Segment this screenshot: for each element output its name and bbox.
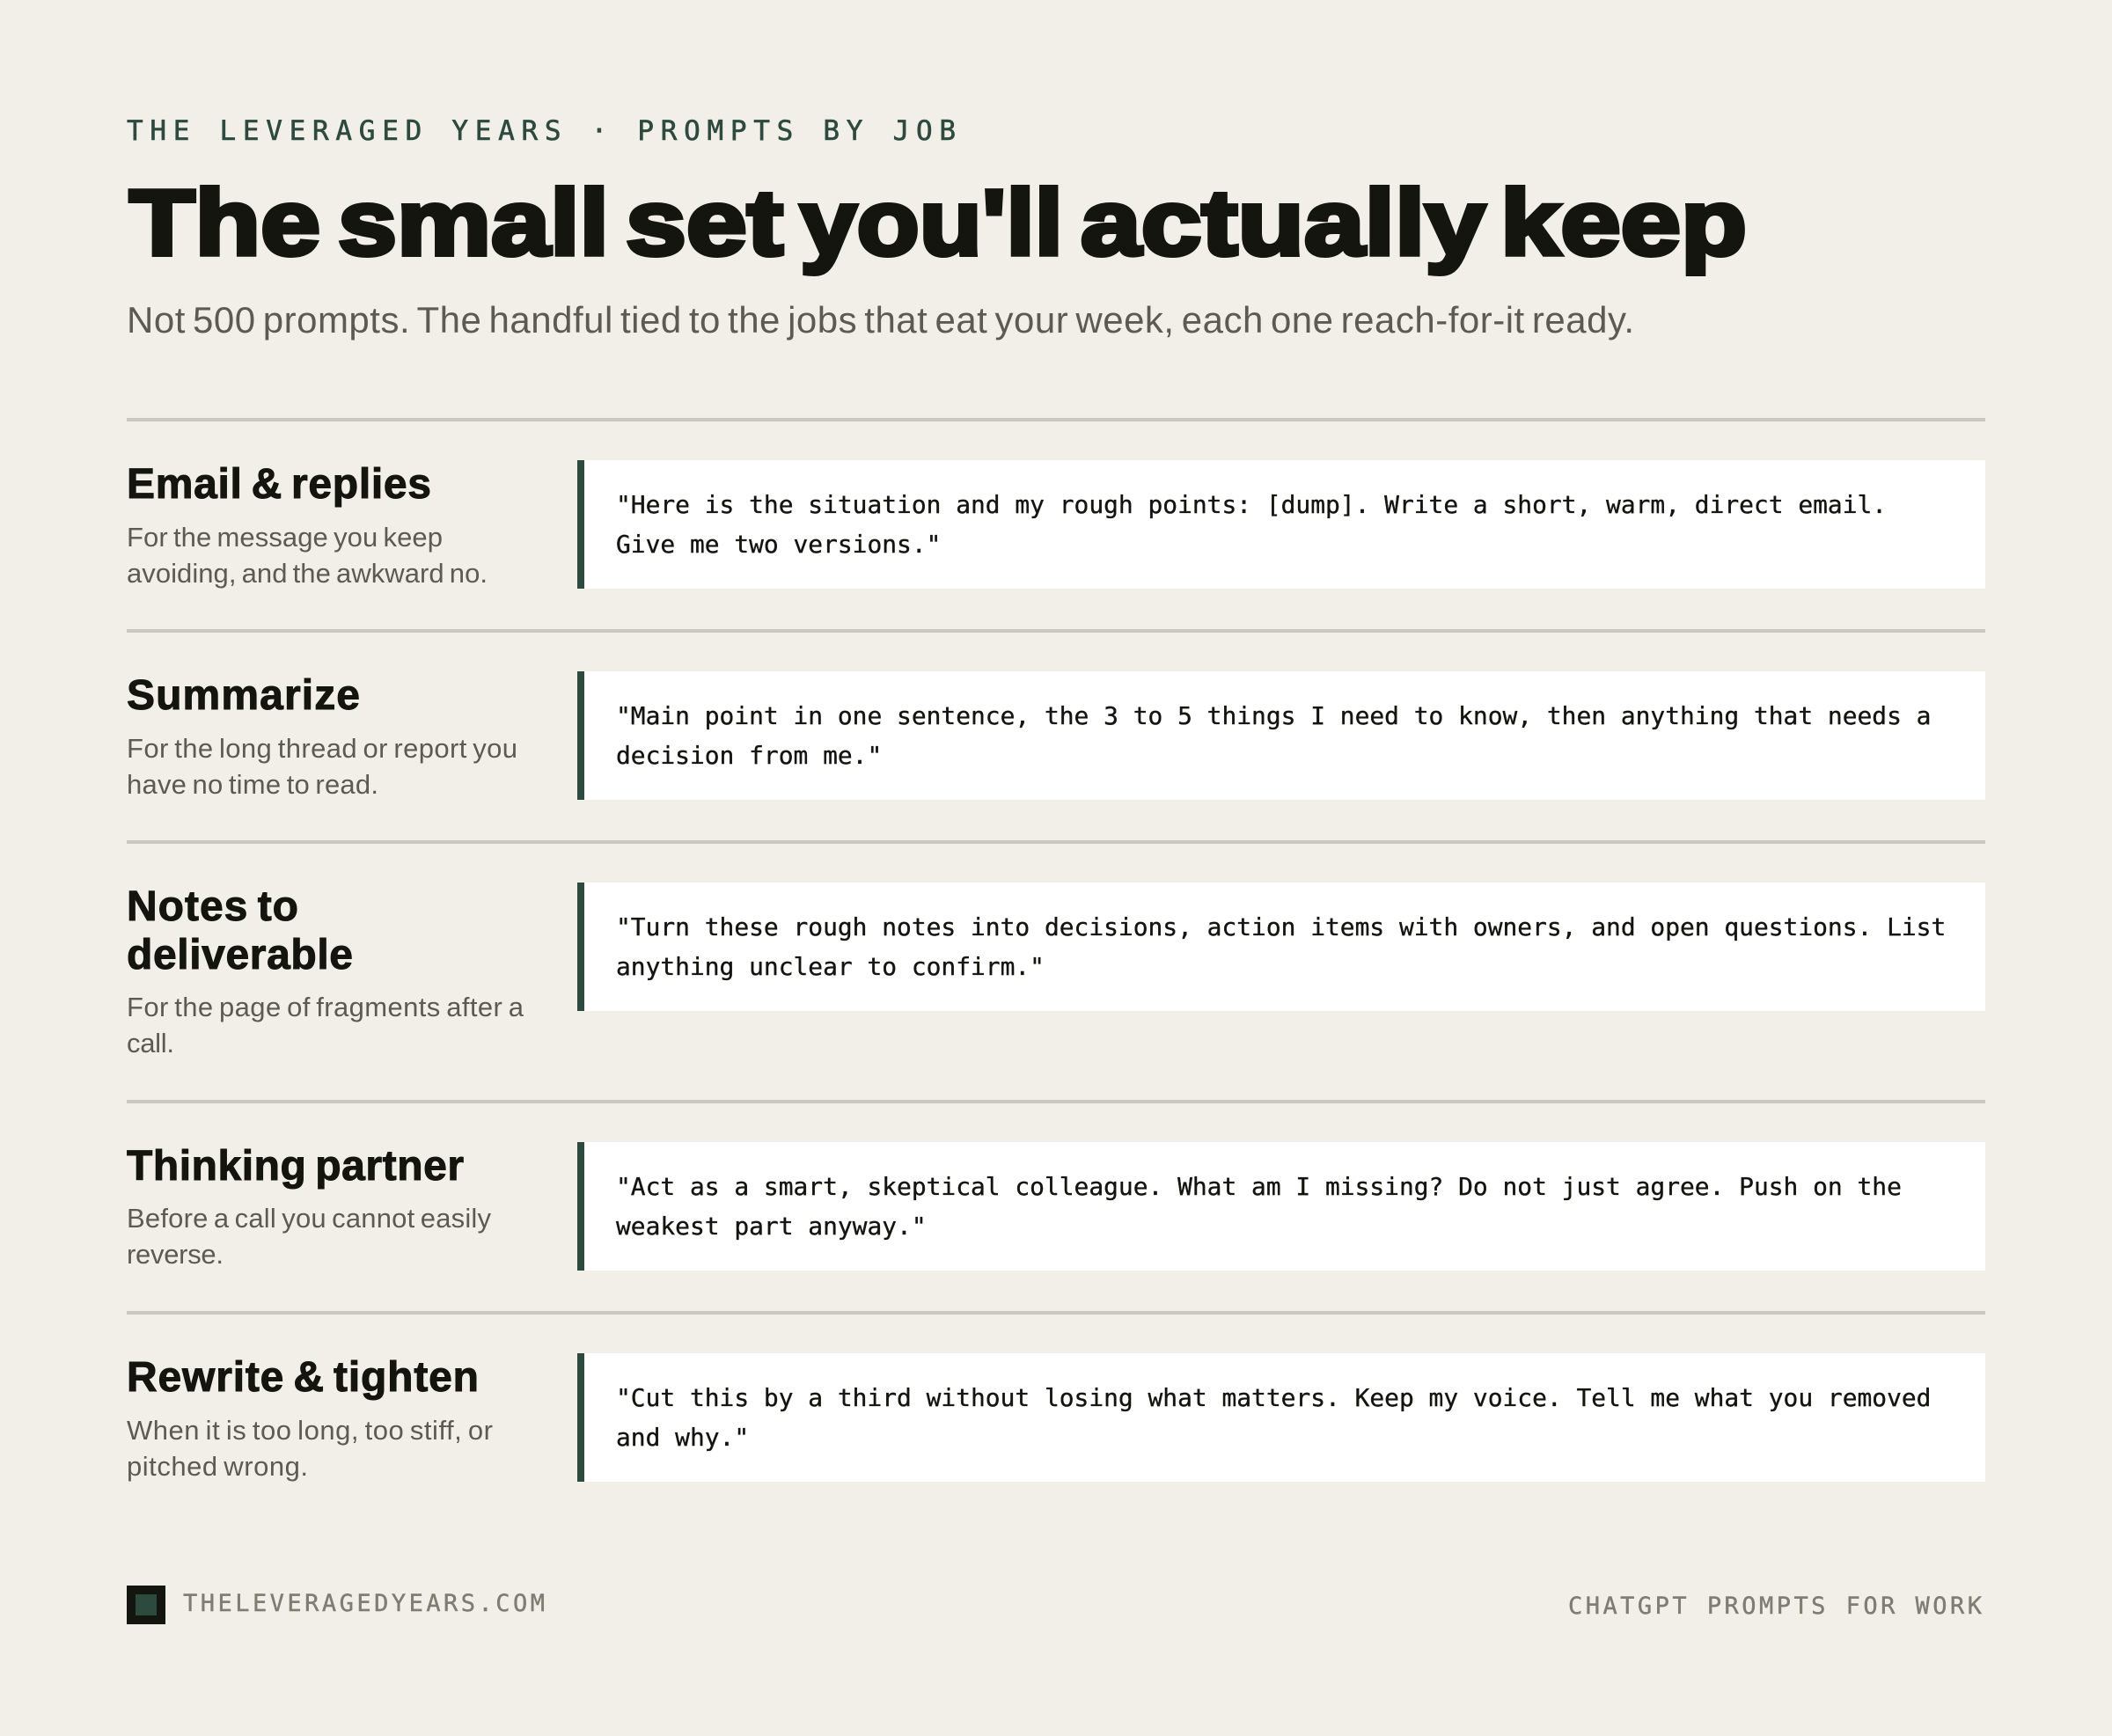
prompt card: Summarize: decision from me." [616, 741, 882, 770]
prompt card: Notes to deliverable: "Turn these rough notes into decisions, action items with owners, and open questions. List [616, 912, 1946, 941]
heading: Email & replies: Email & replies [127, 461, 431, 508]
title: you'll [800, 171, 1063, 275]
prompt card: Email & replies: "Here is the situation and my rough points: [dump]. Write a short, warm, direct email. [616, 490, 1887, 519]
row rule 2 [127, 629, 1985, 633]
description: Rewrite & tighten [127, 1415, 493, 1482]
prompt card: Email & replies: Give me two versions." [616, 530, 941, 559]
description: Rewrite & tighten: pitched wrong. [127, 1451, 308, 1482]
panel: Notes to deliverable [127, 883, 1985, 1058]
prompt card: Thinking partner [577, 1142, 1985, 1271]
footer logo icon [127, 1586, 165, 1624]
title: The [129, 171, 320, 275]
heading: Thinking partner: Thinking partner [127, 1143, 464, 1190]
description: Thinking partner [127, 1203, 491, 1270]
description: Thinking partner: reverse. [127, 1239, 224, 1270]
row rule 1 [127, 418, 1985, 421]
row rule 4 [127, 1100, 1985, 1103]
description: Thinking partner: Before a call you cannot easily [127, 1203, 491, 1234]
prompt card: Thinking partner: weakest part anyway." [616, 1212, 927, 1241]
title: actually [1081, 171, 1485, 275]
footer website: THELEVERAGEDYEARS.COM [183, 1590, 545, 1617]
panel: Rewrite & tighten [127, 1353, 1985, 1482]
title [129, 171, 1747, 275]
description: Notes to deliverable: call. [127, 1028, 174, 1058]
heading: Rewrite & tighten: Rewrite & tighten [127, 1354, 479, 1401]
description: Notes to deliverable [127, 992, 524, 1058]
eyebrow: THE LEVERAGED YEARS · PROMPTS BY JOB [127, 115, 956, 147]
prompt card: Thinking partner: "Act as a smart, skeptical colleague. What am I missing? Do not just agree. Push on the [616, 1172, 1902, 1201]
title: small [338, 171, 609, 275]
row rule 3 [127, 840, 1985, 844]
prompt card: Email & replies [577, 460, 1985, 589]
panel: Summarize [127, 671, 1985, 800]
description: Email & replies: For the message you keep [127, 522, 443, 553]
footer tag: CHATGPT PROMPTS FOR WORK [1568, 1593, 1983, 1620]
description: Summarize [127, 733, 517, 800]
description: Email & replies: avoiding, and the awkward no. [127, 558, 488, 589]
title: set [626, 171, 783, 275]
heading: Notes to deliverable [127, 883, 353, 978]
description: Summarize: For the long thread or report you [127, 733, 517, 764]
prompt card: Notes to deliverable [577, 883, 1985, 1011]
panel: Email & replies [127, 460, 1985, 589]
subtitle: Not 500 prompts. The handful tied to the jobs that eat your week, each one reach-for-it ready. [127, 299, 1634, 341]
description: Summarize: have no time to read. [127, 769, 378, 800]
prompt card: Notes to deliverable: anything unclear to confirm." [616, 952, 1045, 981]
prompt card: Summarize [577, 671, 1985, 800]
description: Rewrite & tighten: When it is too long, too stiff, or [127, 1415, 493, 1446]
prompt card: Summarize: "Main point in one sentence, the 3 to 5 things I need to know, then anything that needs a [616, 701, 1931, 730]
row rule 5 [127, 1311, 1985, 1315]
heading: Summarize: Summarize [127, 672, 360, 719]
panel: Thinking partner [127, 1142, 1985, 1271]
heading: Notes to deliverable: deliverable [127, 932, 353, 978]
description: Notes to deliverable: For the page of fragments after a [127, 992, 524, 1022]
heading: Notes to deliverable: Notes to [127, 883, 298, 930]
prompt card: Rewrite & tighten: and why." [616, 1423, 749, 1452]
title: keep [1500, 171, 1747, 275]
description: Email & replies [127, 522, 488, 589]
prompt card: Rewrite & tighten: "Cut this by a third without losing what matters. Keep my voice. Tell me what you removed [616, 1383, 1931, 1412]
prompt card: Rewrite & tighten [577, 1353, 1985, 1482]
